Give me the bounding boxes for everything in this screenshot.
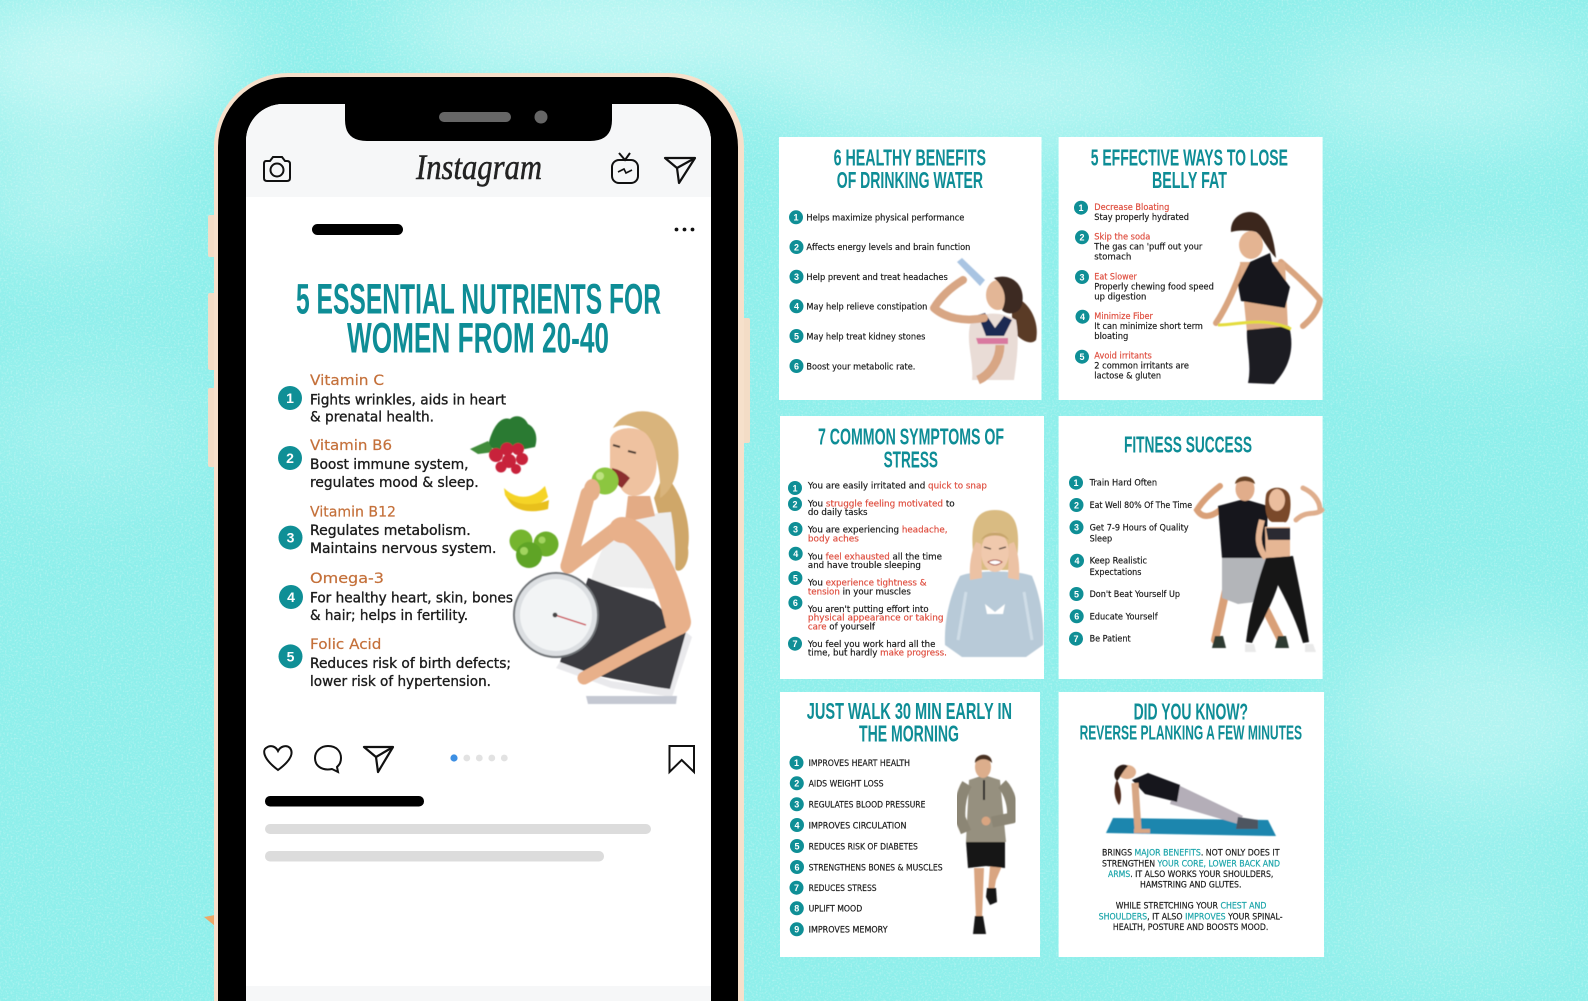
paragraph: plank benefits: HAMSTRING AND GLUTES. bbox=[1140, 881, 1241, 891]
list: fitness tips: 6 bbox=[1074, 612, 1079, 622]
list: fitness tips: 1 bbox=[1073, 478, 1079, 488]
panel: stress symptoms bbox=[780, 416, 1044, 679]
list: stress symptoms: body aches bbox=[808, 535, 859, 545]
list: stress symptoms: You experience tightness & bbox=[807, 579, 927, 589]
icon: heart bbox=[264, 746, 292, 770]
list: stress symptoms: You feel exhausted all the time bbox=[807, 552, 942, 562]
list: walking benefits bbox=[790, 756, 943, 936]
nutrient 2 bbox=[278, 438, 479, 491]
nutrient 5: lower risk of hypertension. bbox=[310, 674, 491, 690]
heading: drinking water: OF DRINKING WATER bbox=[837, 167, 983, 193]
panel: belly fat bbox=[1059, 137, 1323, 400]
list: stress symptoms: You are easily irritated and quick to snap bbox=[807, 482, 987, 492]
list: belly fat tips: 2 bbox=[1079, 233, 1085, 243]
nutrient 2: 2 bbox=[286, 450, 294, 466]
illustration: woman with scale bbox=[514, 411, 692, 704]
list: walking benefits: IMPROVES HEART HEALTH bbox=[809, 759, 910, 769]
list: belly fat tips bbox=[1074, 201, 1214, 382]
illustration: reverse plank on mat bbox=[1106, 765, 1276, 836]
list: stress symptoms: You struggle feeling motivated to bbox=[807, 499, 955, 509]
list: stress symptoms: You feel you work hard all the bbox=[807, 640, 935, 650]
post heading bbox=[296, 276, 661, 362]
list: fitness tips: Sleep bbox=[1090, 534, 1112, 544]
list: fitness tips: 4 bbox=[1074, 556, 1080, 566]
list: belly fat tips: 5 bbox=[1079, 352, 1085, 362]
nutrient 1 bbox=[278, 373, 507, 426]
icon: comment bbox=[315, 746, 341, 772]
list: stress symptoms: time, but hardly make progress. bbox=[808, 649, 947, 659]
list: belly fat tips: 1 bbox=[1078, 203, 1084, 213]
panel: reverse planking bbox=[1059, 692, 1324, 957]
list: water benefits bbox=[789, 210, 970, 373]
list: fitness tips: 5 bbox=[1074, 589, 1079, 599]
list: water benefits: 5 bbox=[794, 331, 799, 341]
heading: drinking water bbox=[834, 144, 986, 193]
list: stress symptoms: You are experiencing headache, bbox=[807, 526, 948, 536]
list: belly fat tips: Minimize Fiber bbox=[1094, 312, 1153, 322]
list: belly fat tips: The gas can 'puff out your bbox=[1093, 243, 1203, 253]
icon: bookmark bbox=[670, 746, 694, 772]
illustration: woman drinking water bbox=[934, 258, 1037, 380]
phone side buttons bbox=[204, 215, 750, 926]
list: fitness tips: Expectations bbox=[1090, 568, 1142, 578]
list: stress symptoms: physical appearance or taking bbox=[808, 614, 944, 624]
list: fitness tips: Don't Beat Yourself Up bbox=[1090, 590, 1180, 600]
nutrient 4: Omega-3 bbox=[310, 571, 384, 587]
heading: drinking water: 6 HEALTHY BENEFITS bbox=[834, 144, 986, 170]
list: water benefits: Affects energy levels and brain function bbox=[806, 243, 970, 253]
list: fitness tips: Get 7-9 Hours of Quality bbox=[1090, 523, 1189, 533]
list: water benefits: Helps maximize physical performance bbox=[806, 214, 964, 224]
list: belly fat tips: 3 bbox=[1079, 272, 1085, 282]
nutrient 1: 1 bbox=[286, 390, 294, 406]
heading: morning walk bbox=[807, 698, 1012, 746]
heading: morning walk: THE MORNING bbox=[859, 720, 959, 746]
list: walking benefits: 2 bbox=[794, 779, 799, 789]
list: fitness tips: 2 bbox=[1074, 500, 1079, 510]
nutrient 4: For healthy heart, skin, bones bbox=[310, 591, 513, 607]
nutrient 1: Vitamin C bbox=[310, 373, 384, 389]
heading: morning walk: JUST WALK 30 MIN EARLY IN bbox=[807, 698, 1012, 724]
heading: belly fat: BELLY FAT bbox=[1152, 167, 1227, 193]
icon: send top bbox=[665, 158, 695, 183]
list: walking benefits: STRENGTHENS BONES & MUSCLES bbox=[809, 863, 943, 873]
list: walking benefits: UPLIFT MOOD bbox=[809, 905, 862, 915]
list: fitness tips: Eat Well 80% Of The Time bbox=[1090, 501, 1192, 511]
list: water benefits: 3 bbox=[794, 272, 799, 282]
list: fitness tips: Educate Yourself bbox=[1090, 612, 1158, 622]
nutrient 2: regulates mood & sleep. bbox=[310, 475, 479, 491]
heading: fitness: FITNESS SUCCESS bbox=[1124, 431, 1252, 457]
list: walking benefits: IMPROVES CIRCULATION bbox=[809, 821, 906, 831]
list: walking benefits: 8 bbox=[794, 904, 799, 914]
list: belly fat tips: lactose & gluten bbox=[1094, 372, 1161, 382]
list: fitness tips: Be Patient bbox=[1090, 635, 1131, 645]
list: walking benefits: REGULATES BLOOD PRESSURE bbox=[809, 801, 925, 811]
nutrient 3 bbox=[278, 505, 496, 557]
list: stress symptoms: and have trouble sleeping bbox=[808, 561, 921, 571]
list: stress symptoms: 6 bbox=[793, 598, 798, 608]
list: fitness tips: Train Hard Often bbox=[1089, 479, 1157, 489]
list: stress symptoms: 3 bbox=[793, 524, 798, 534]
icon: camera bbox=[264, 157, 290, 181]
list: water benefits: 1 bbox=[793, 213, 799, 223]
illustration: green apples bbox=[510, 530, 558, 568]
nutrient 4: 4 bbox=[287, 589, 295, 605]
list: walking benefits: AIDS WEIGHT LOSS bbox=[809, 780, 884, 790]
nutrient 1: Fights wrinkles, aids in heart bbox=[310, 392, 507, 408]
nutrient 4: & hair; helps in fertility. bbox=[310, 608, 468, 624]
list: stress symptoms bbox=[788, 481, 987, 659]
list: fitness tips: 7 bbox=[1073, 634, 1079, 644]
caption placeholder 1 bbox=[265, 824, 651, 834]
nutrient 2: Boost immune system, bbox=[310, 457, 468, 473]
list: water benefits: May help treat kidney stones bbox=[806, 332, 926, 342]
nutrient 2: Vitamin B6 bbox=[310, 438, 392, 454]
illustration: fit couple bbox=[1197, 476, 1322, 652]
list: walking benefits: REDUCES STRESS bbox=[809, 884, 877, 894]
list: stress symptoms: tension in your muscles bbox=[808, 587, 911, 597]
list: stress symptoms: 1 bbox=[792, 483, 798, 493]
paragraph: plank benefits: BRINGS MAJOR BENEFITS. NOT ONLY DOES IT bbox=[1102, 849, 1280, 859]
list: walking benefits: 5 bbox=[794, 841, 800, 851]
panel: fitness success bbox=[1059, 416, 1323, 679]
list: fitness tips: 3 bbox=[1074, 523, 1079, 533]
paragraph: plank benefits: STRENGTHEN YOUR CORE, LOWER BACK AND bbox=[1102, 859, 1280, 869]
paragraph: plank benefits: ARMS. IT ALSO WORKS YOUR SHOULDERS, bbox=[1108, 870, 1273, 880]
Instagram logo: Instagram bbox=[415, 147, 542, 187]
nutrient 3: Maintains nervous system. bbox=[310, 541, 496, 557]
nutrient 3: Regulates metabolism. bbox=[310, 523, 471, 539]
list: belly fat tips: bloating bbox=[1094, 332, 1128, 342]
list: walking benefits: 7 bbox=[794, 883, 799, 893]
paragraph: plank benefits: HEALTH, POSTURE AND BOOSTS MOOD. bbox=[1113, 923, 1268, 933]
list: stress symptoms: You aren't putting effort into bbox=[807, 605, 929, 615]
list: walking benefits: REDUCES RISK OF DIABETES bbox=[809, 842, 918, 852]
list: stress symptoms: 7 bbox=[792, 639, 798, 649]
panel: drinking water bbox=[779, 137, 1042, 400]
illustration: radishes bbox=[470, 416, 536, 474]
profile name placeholder bbox=[312, 224, 403, 235]
phone screen bbox=[246, 104, 711, 1001]
list: belly fat tips: 2 common irritants are bbox=[1094, 362, 1189, 372]
icon: share bbox=[364, 747, 393, 772]
carousel dots bbox=[450, 754, 508, 762]
paragraph: plank benefits: SHOULDERS, IT ALSO IMPROVES YOUR SPINAL- bbox=[1099, 912, 1283, 922]
list: fitness tips: Keep Realistic bbox=[1090, 557, 1147, 567]
post heading: WOMEN FROM 20-40 bbox=[347, 314, 609, 362]
list: stress symptoms: do daily tasks bbox=[808, 508, 868, 518]
nutrient 4 bbox=[279, 571, 513, 624]
list: belly fat tips: 4 bbox=[1080, 312, 1085, 322]
list: walking benefits: 6 bbox=[794, 862, 800, 872]
nutrient 5: Folic Acid bbox=[310, 637, 381, 653]
caption placeholder 2 bbox=[265, 851, 604, 862]
heading: reverse planking: REVERSE PLANKING A FEW MINUTES bbox=[1080, 723, 1302, 745]
list: belly fat tips: up digestion bbox=[1094, 292, 1146, 302]
list: walking benefits: 9 bbox=[794, 925, 799, 935]
illustration: runner bbox=[960, 755, 1013, 934]
nutrient 1: & prenatal health. bbox=[310, 410, 434, 426]
heading: stress bbox=[818, 424, 1004, 472]
list: stress symptoms: 2 bbox=[792, 499, 798, 509]
heading: reverse planking bbox=[1080, 698, 1302, 745]
illustration: bananas bbox=[504, 486, 549, 511]
panel: morning walk bbox=[780, 692, 1040, 957]
list: stress symptoms: 4 bbox=[793, 549, 798, 559]
icon: more dots bbox=[675, 228, 694, 231]
nutrient 5: Reduces risk of birth defects; bbox=[310, 656, 511, 672]
list: belly fat tips: It can minimize short term bbox=[1094, 322, 1203, 332]
list: belly fat tips: Properly chewing food speed bbox=[1094, 282, 1214, 292]
list: walking benefits: 4 bbox=[794, 820, 800, 830]
list: water benefits: 6 bbox=[794, 361, 799, 371]
list: water benefits: Boost your metabolic rate. bbox=[806, 362, 915, 372]
list: water benefits: Help prevent and treat headaches bbox=[806, 273, 948, 283]
list: belly fat tips: Eat Slower bbox=[1094, 272, 1137, 282]
list: water benefits: 2 bbox=[794, 242, 799, 252]
heading: stress: STRESS bbox=[884, 446, 938, 472]
illustration: woman measuring waist bbox=[1216, 212, 1320, 384]
illustration: stressed woman bbox=[945, 510, 1043, 657]
paragraph: plank benefits bbox=[1099, 849, 1283, 933]
post heading: 5 ESSENTIAL NUTRIENTS FOR bbox=[296, 276, 661, 324]
phone mockup bbox=[204, 73, 750, 1001]
list: stress symptoms: 5 bbox=[793, 573, 798, 583]
nutrient 5 bbox=[278, 637, 511, 690]
paragraph: plank benefits: WHILE STRETCHING YOUR CHEST AND bbox=[1116, 902, 1267, 912]
list: walking benefits: 3 bbox=[794, 800, 799, 810]
phone notch bbox=[345, 100, 612, 141]
likes placeholder bbox=[265, 796, 424, 806]
list: fitness tips bbox=[1069, 476, 1192, 646]
list: belly fat tips: stomach bbox=[1094, 252, 1131, 262]
nutrient 3: 3 bbox=[287, 530, 295, 546]
list: walking benefits: IMPROVES MEMORY bbox=[809, 926, 888, 936]
heading: stress: 7 COMMON SYMPTOMS OF bbox=[818, 424, 1004, 450]
icon: IGTV bbox=[612, 153, 638, 183]
list: stress symptoms: care of yourself bbox=[808, 623, 876, 633]
list: walking benefits: 1 bbox=[794, 758, 799, 768]
heading: reverse planking: DID YOU KNOW? bbox=[1134, 698, 1248, 724]
heading: belly fat: 5 EFFECTIVE WAYS TO LOSE bbox=[1091, 144, 1288, 170]
list: belly fat tips: Avoid irritants bbox=[1094, 352, 1152, 362]
nutrient 5: 5 bbox=[287, 648, 295, 664]
nutrient 3: Vitamin B12 bbox=[310, 505, 396, 521]
list: water benefits: 4 bbox=[794, 302, 799, 312]
list: belly fat tips: Stay properly hydrated bbox=[1094, 213, 1189, 223]
list: belly fat tips: Decrease Bloating bbox=[1094, 203, 1169, 213]
list: water benefits: May help relieve constipation bbox=[806, 303, 927, 313]
list: belly fat tips: Skip the soda bbox=[1094, 233, 1150, 243]
heading: belly fat bbox=[1091, 144, 1288, 193]
